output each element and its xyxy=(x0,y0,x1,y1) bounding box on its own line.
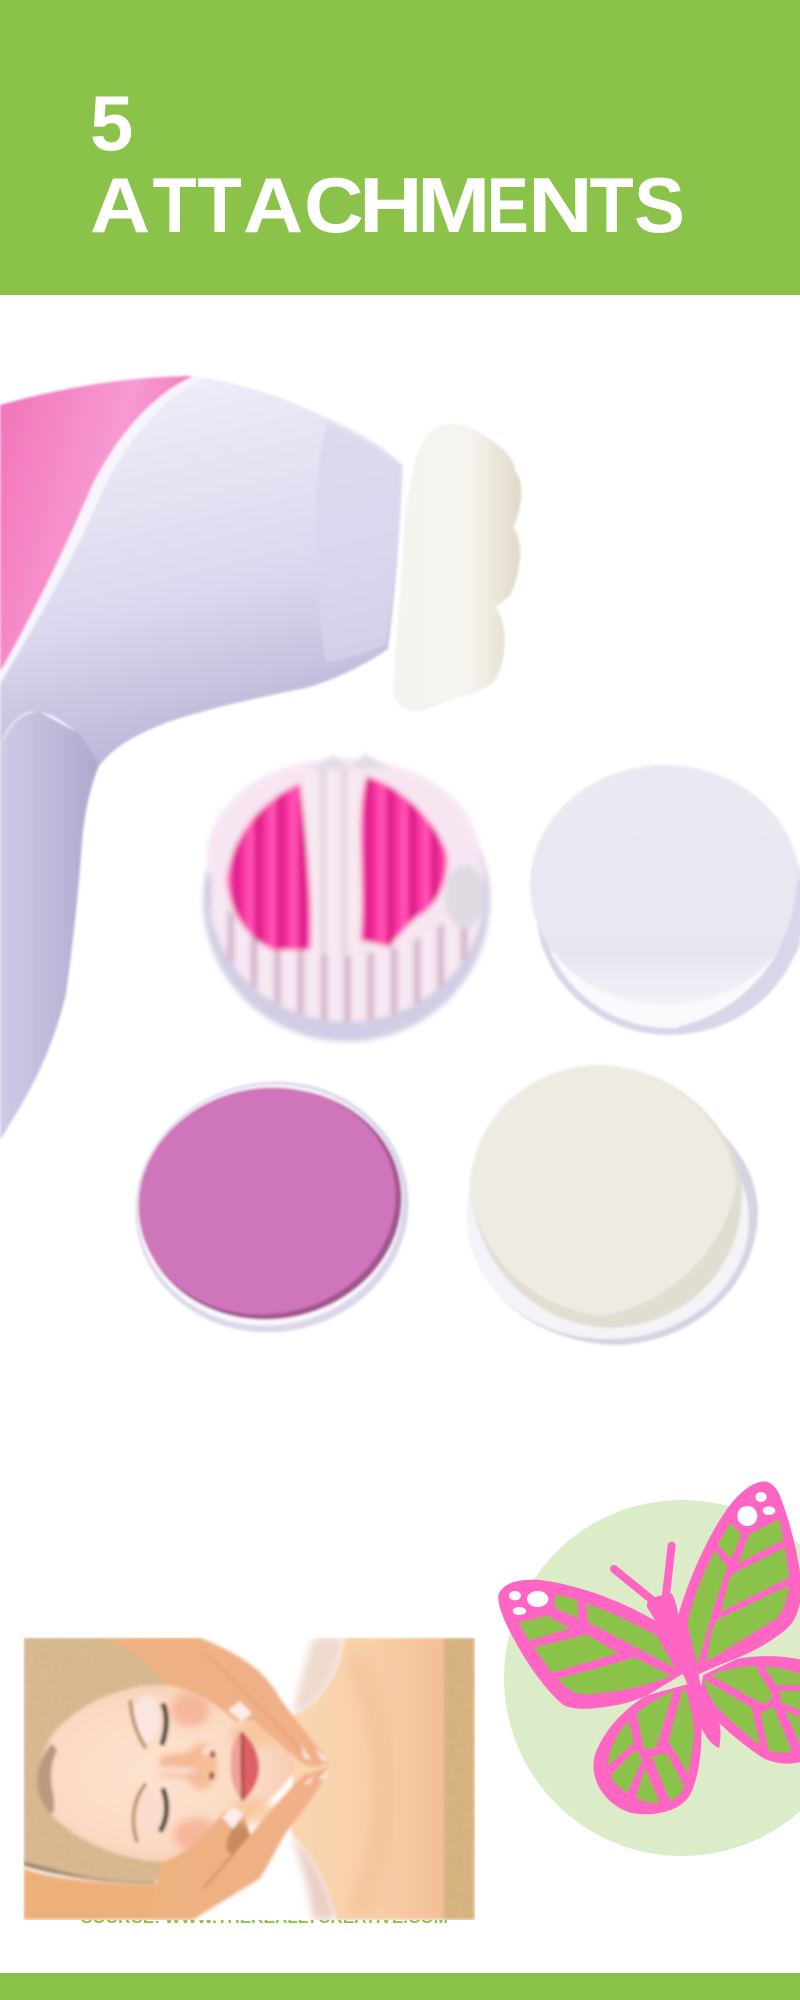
source line (partly hidden by photo): SOURCE: WWW.THEREALLYCREATIVE.COM xyxy=(81,1908,448,1927)
head seam xyxy=(316,422,401,662)
eyelid highlights xyxy=(134,1695,159,1742)
lower left wing xyxy=(593,1682,702,1814)
device head xyxy=(0,376,403,765)
cheeks xyxy=(170,1693,210,1727)
lips xyxy=(239,1732,262,1801)
towel shadow xyxy=(24,1862,155,1884)
brush base rim xyxy=(203,758,490,1042)
antennae xyxy=(614,1569,653,1601)
white centre stripe xyxy=(307,770,363,953)
title: C xyxy=(304,162,364,249)
face xyxy=(38,1685,295,1862)
title: 5 xyxy=(90,79,133,167)
title: N xyxy=(528,161,593,249)
mauve pad rim xyxy=(115,1060,429,1354)
cream sponge attachment xyxy=(467,1065,758,1345)
butterfly illustration xyxy=(498,1481,800,1814)
mauve pad edge xyxy=(122,1068,420,1340)
head towel xyxy=(24,1638,180,1882)
upper hand xyxy=(100,1638,330,1766)
pink band xyxy=(0,376,194,672)
title: S xyxy=(634,162,685,249)
hair xyxy=(37,1743,57,1813)
title: A xyxy=(90,162,150,249)
highlight strip on band xyxy=(0,376,203,684)
title: E xyxy=(487,161,529,249)
body xyxy=(647,1593,721,1748)
neck and chest xyxy=(292,1638,447,1920)
lower bristles xyxy=(208,758,485,1022)
title xyxy=(90,79,685,249)
right towel xyxy=(444,1638,475,1920)
white sponge cap xyxy=(530,765,800,1005)
title: H xyxy=(359,162,423,249)
eyebrows xyxy=(130,1700,146,1748)
upper left wing xyxy=(498,1580,687,1709)
cream pad cap xyxy=(470,1065,736,1316)
title: M xyxy=(417,162,490,249)
lower right wing xyxy=(700,1656,800,1764)
title: A xyxy=(243,162,303,249)
white sponge attachment xyxy=(530,765,800,1035)
title: T xyxy=(590,162,634,249)
pink bristles right xyxy=(360,777,447,947)
title: T xyxy=(152,162,197,249)
side sponge attachment xyxy=(393,424,521,711)
upper right wing xyxy=(678,1481,800,1675)
arm xyxy=(24,1866,158,1920)
grey highlight on rim xyxy=(445,865,485,928)
pink bristles left xyxy=(227,783,311,950)
decorative green circle xyxy=(504,1500,800,1856)
lower hand xyxy=(153,1767,330,1920)
brush top xyxy=(207,758,480,955)
shadow between fingers xyxy=(224,1816,252,1857)
butterfly wing spots xyxy=(509,1492,775,1615)
chest shading xyxy=(353,1655,384,1915)
nose xyxy=(158,1743,218,1790)
white sponge rim xyxy=(536,781,800,1035)
white spikes xyxy=(310,753,390,770)
butterfly silhouette xyxy=(498,1481,800,1814)
footer band xyxy=(0,1973,800,2000)
pink brush attachment xyxy=(203,753,490,1042)
mauve pad xyxy=(120,1067,414,1335)
butterfly wing cells xyxy=(518,1519,800,1803)
cream pad side xyxy=(470,1065,742,1328)
header banner xyxy=(0,0,800,295)
title: T xyxy=(198,162,242,249)
mauve sponge attachment xyxy=(115,1060,429,1354)
fingernails xyxy=(228,1701,252,1722)
shadows on white background xyxy=(293,1638,345,1715)
eyelashes xyxy=(162,1703,166,1745)
photo: woman receiving facial massage xyxy=(24,1638,475,1920)
cream pad rim xyxy=(467,1090,758,1345)
product: facial brush device with attachments xyxy=(0,376,800,1354)
device handle xyxy=(0,712,102,1140)
